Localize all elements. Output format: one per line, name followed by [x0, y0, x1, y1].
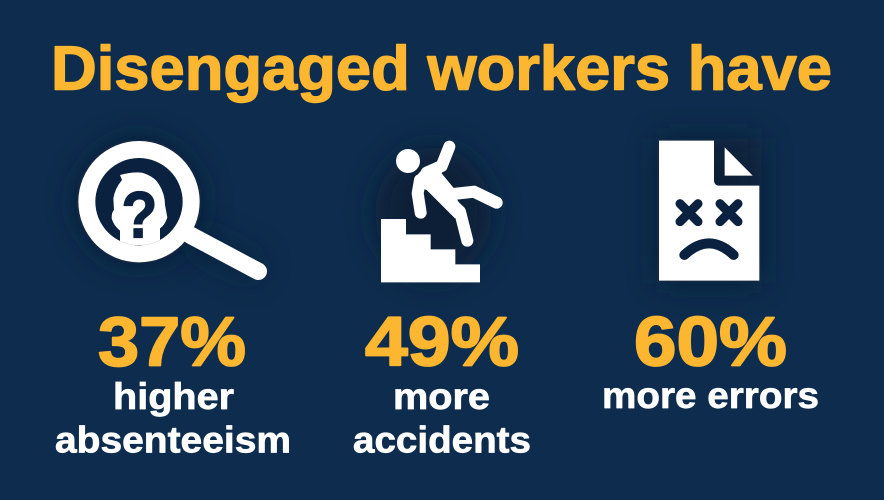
stat: 37% higher absenteeism: higher — [113, 376, 234, 417]
icon: person falling down stairs — [375, 147, 497, 282]
stat: 60% more errors — [602, 302, 819, 416]
stat: 49% more accidents: accidents — [353, 420, 531, 460]
icon: magnifying glass with question mark: ? — [121, 177, 157, 251]
stat: 49% more accidents: 49% — [365, 302, 519, 380]
stat: 37% higher absenteeism — [55, 302, 291, 460]
stat: 49% more accidents — [353, 302, 531, 460]
title: Disengaged workers have — [51, 34, 832, 104]
stat: 49% more accidents: more — [393, 376, 490, 417]
stat: 60% more errors: more errors — [602, 375, 819, 416]
icon: magnifying glass with question mark — [76, 138, 259, 271]
stat: 37% higher absenteeism: 37% — [98, 302, 246, 380]
icon: document with sad face — [657, 138, 762, 283]
stat: 37% higher absenteeism: absenteeism — [55, 420, 291, 460]
stat: 60% more errors: 60% — [634, 302, 787, 380]
